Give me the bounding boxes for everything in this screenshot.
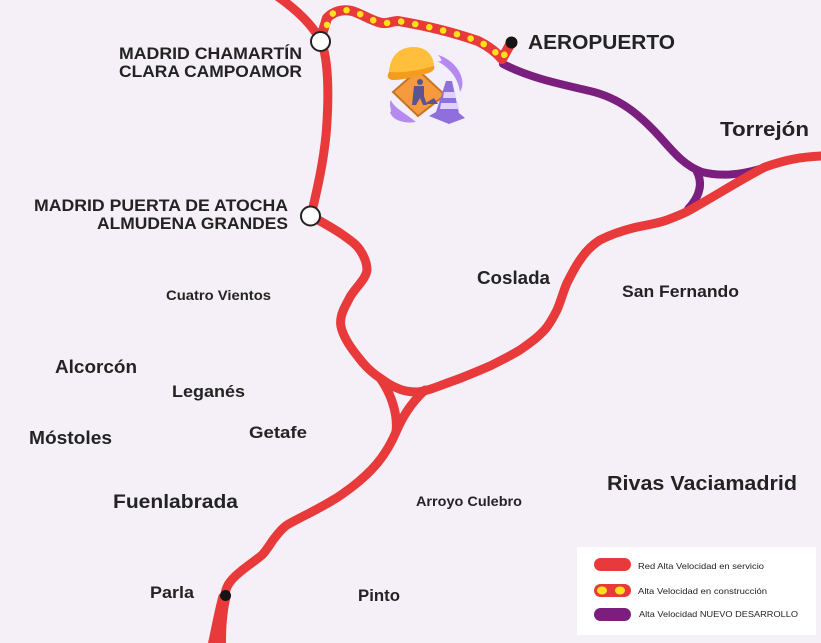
purple new development line: [503, 64, 772, 209]
icon: road works: [388, 47, 465, 124]
legend: in service: [594, 558, 764, 571]
label: Leganés: Leganés: [172, 382, 245, 401]
legend: [577, 547, 816, 635]
label: Rivas Vaciamadrid: Rivas Vaciamadrid: [607, 473, 797, 495]
red tail below Parla: [208, 594, 231, 643]
legend: under construction: [594, 584, 767, 597]
heading: Madrid Puerta de Atocha Almudena Grandes: ALMUDENA GRANDES: [97, 215, 288, 233]
label: Torrejón: Torrejón: [720, 119, 809, 141]
label: Getafe: Getafe: [249, 424, 307, 442]
legend: new development: Alta Velocidad NUEVO DESARROLLO: [639, 609, 798, 619]
label: Coslada: Coslada: [477, 268, 551, 288]
heading: Madrid Chamartín Clara Campoamor: MADRID CHAMARTÍN: [119, 44, 302, 63]
station: Parla: [220, 590, 231, 601]
red high speed line in service: [225, 0, 821, 595]
label: Pinto: Pinto: [358, 587, 400, 605]
heading: Madrid Puerta de Atocha Almudena Grandes: MADRID PUERTA DE ATOCHA: [34, 197, 288, 215]
label: Arroyo Culebro: Arroyo Culebro: [416, 493, 522, 509]
label: Aeropuerto: AEROPUERTO: [528, 32, 675, 54]
label: San Fernando: San Fernando: [622, 283, 739, 301]
label: Móstoles: Móstoles: [29, 428, 112, 448]
legend: new development: [594, 608, 798, 621]
label: Cuatro Vientos: Cuatro Vientos: [166, 288, 271, 303]
heading: Madrid Chamartín Clara Campoamor: CLARA CAMPOAMOR: [119, 63, 302, 81]
legend: in service: Red Alta Velocidad en servicio: [638, 561, 764, 571]
label: Parla: Parla: [150, 584, 195, 602]
construction line: [320, 10, 511, 59]
station: Madrid Atocha: [301, 206, 320, 226]
station: Madrid Chamartín: [311, 32, 330, 51]
label: Alcorcón: Alcorcón: [55, 357, 137, 377]
heading: Madrid Puerta de Atocha Almudena Grandes: [34, 197, 288, 233]
label: Fuenlabrada: Fuenlabrada: [113, 491, 238, 513]
legend: under construction: Alta Velocidad en construcción: [638, 586, 767, 596]
station: Aeropuerto: [506, 36, 518, 48]
heading: Madrid Chamartín Clara Campoamor: [119, 44, 302, 81]
